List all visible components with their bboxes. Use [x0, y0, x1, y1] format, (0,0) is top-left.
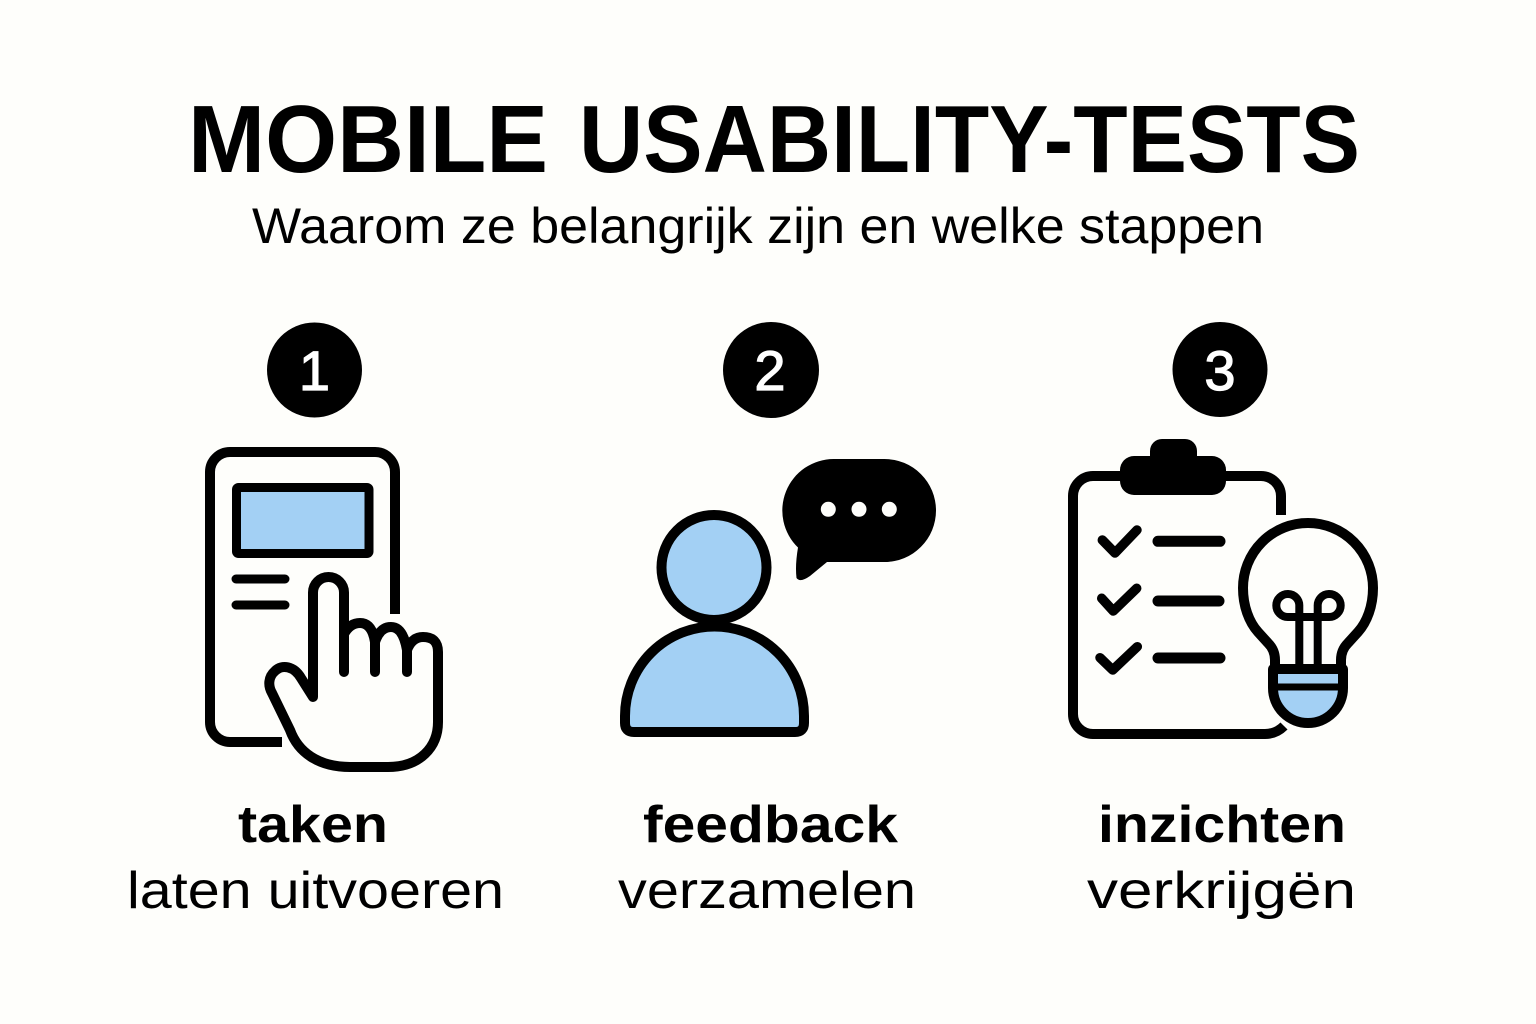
speech bubble dots [821, 502, 897, 517]
label: inzichten verkrijgen: verkrijgën [1087, 862, 1356, 920]
number badge 2 [723, 322, 819, 418]
phone outline [210, 452, 395, 742]
speech bubble [782, 459, 936, 580]
icon: person with speech bubble [625, 459, 936, 732]
label: inzichten verkrijgen: inzichten [1098, 796, 1346, 854]
person head [662, 515, 766, 620]
icon: phone with tapping hand [210, 452, 438, 767]
light bulb base [1273, 669, 1343, 723]
number badge 2: 2 [754, 339, 786, 402]
subtitle: Waarom ze belangrijk zijn en welke stappen [252, 198, 1264, 254]
text lines [236, 579, 285, 605]
hand [269, 577, 438, 767]
label: taken laten uitvoeren [127, 796, 504, 920]
title [188, 86, 1360, 193]
icon: clipboard with light bulb [1073, 439, 1373, 734]
label: taken laten uitvoeren: laten uitvoeren [127, 862, 504, 920]
person body [625, 626, 804, 732]
title: MOBILE [188, 86, 548, 193]
light bulb filament [1276, 594, 1341, 664]
label: feedback verzamelen: verzamelen [618, 862, 916, 920]
label: feedback verzamelen: feedback [643, 796, 898, 854]
label: feedback verzamelen [618, 796, 916, 920]
number badge 3 [1172, 322, 1268, 417]
label: inzichten verkrijgen [1087, 796, 1356, 920]
step 1: taken laten uitvoeren [127, 322, 504, 920]
light bulb glass [1243, 523, 1373, 668]
step 2: feedback verzamelen [618, 322, 936, 920]
number badge 1: 1 [299, 339, 330, 402]
number badge 1 [267, 322, 362, 418]
number badge 3: 3 [1204, 339, 1236, 402]
title: USABILITY-TESTS [579, 86, 1360, 193]
clipboard clip [1120, 439, 1226, 495]
step 3: inzichten verkrijgen [1073, 322, 1373, 920]
label: taken laten uitvoeren: taken [238, 796, 388, 854]
phone screen [236, 488, 369, 554]
checklist [1100, 530, 1220, 670]
clipboard outline [1073, 476, 1284, 734]
